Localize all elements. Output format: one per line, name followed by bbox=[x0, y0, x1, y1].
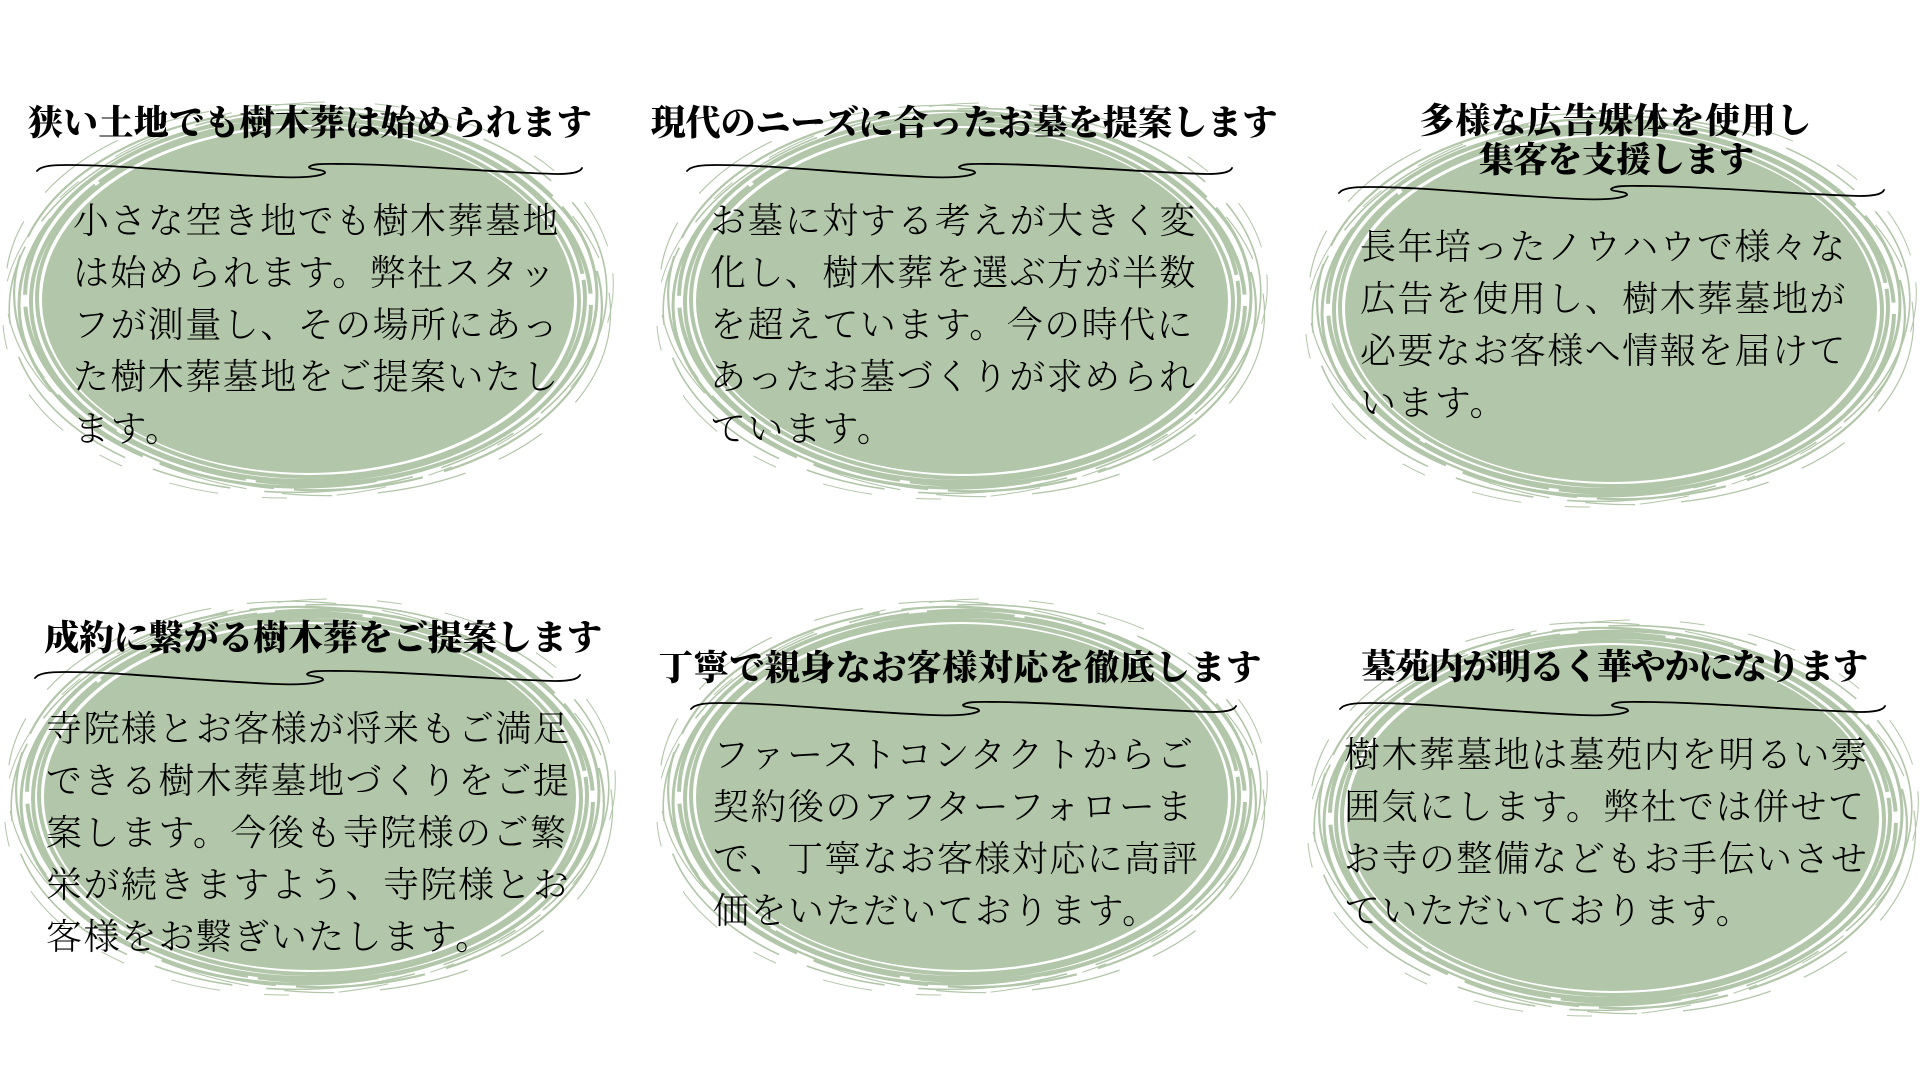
brush ellipse 5 bbox=[640, 574, 1284, 1020]
underline swash 1 bbox=[37, 164, 582, 177]
underline swash 5 bbox=[691, 702, 1236, 715]
brush ellipse 2 bbox=[640, 78, 1284, 524]
body text 1: は始められます。弊社スタッ bbox=[73, 253, 557, 293]
underline swash 6 bbox=[1340, 702, 1885, 715]
heading 5: 丁寧で親身なお客様対応を徹底します bbox=[658, 649, 1262, 688]
body text 1: フが測量し、その場所にあっ bbox=[73, 305, 560, 345]
body text 4 bbox=[46, 709, 570, 957]
body text 5: 契約後のアフターフォローま bbox=[713, 787, 1194, 827]
brush ellipse 4 bbox=[0, 574, 632, 1020]
body text 4: 客様をお繋ぎいたします。 bbox=[46, 917, 493, 957]
body text 1 bbox=[73, 201, 560, 449]
body text 1: た樹木葬墓地をご提案いたし bbox=[73, 357, 560, 397]
underline swash 3 bbox=[1339, 186, 1884, 199]
body text 3: 広告を使用し、樹木葬墓地が bbox=[1360, 279, 1847, 319]
body text 5: ファーストコンタクトからご bbox=[713, 735, 1194, 775]
body text 1: 小さな空き地でも樹木葬墓地 bbox=[73, 201, 560, 241]
heading 1: 狭い土地でも樹木葬は始められます bbox=[28, 104, 592, 143]
body text 5 bbox=[713, 735, 1199, 931]
body text 6: ていただいております。 bbox=[1344, 891, 1753, 931]
body text 3 bbox=[1360, 227, 1847, 423]
heading 2: 現代のニーズに合ったお墓を提案します bbox=[651, 104, 1277, 143]
body text 4: できる樹木葬墓地づくりをご提 bbox=[46, 761, 570, 801]
body text 2: 化し、樹木葬を選ぶ方が半数 bbox=[710, 253, 1197, 293]
heading 3 bbox=[1420, 102, 1812, 180]
body text 1: ます。 bbox=[73, 409, 182, 449]
body text 6 bbox=[1344, 735, 1868, 931]
body text 3: 長年培ったノウハウで様々な bbox=[1360, 227, 1847, 267]
heading 3: 集客を支援します bbox=[1479, 141, 1753, 180]
heading 4: 成約に繋がる樹木葬をご提案します bbox=[44, 619, 602, 658]
brush ellipse 6 bbox=[1291, 595, 1920, 1041]
heading 6: 墓苑内が明るく華やかになります bbox=[1361, 648, 1867, 687]
heading 3: 多様な広告媒体を使用し bbox=[1420, 102, 1812, 141]
body text 6: お寺の整備などもお手伝いさせ bbox=[1344, 839, 1868, 879]
body text 4: 寺院様とお客様が将来もご満足 bbox=[46, 709, 570, 749]
underline swash 4 bbox=[35, 671, 580, 684]
body text 2 bbox=[710, 201, 1197, 449]
body text 4: 案します。今後も寺院様のご繁 bbox=[46, 813, 567, 853]
body text 2: あったお墓づくりが求められ bbox=[710, 357, 1196, 397]
body text 2: ています。 bbox=[710, 409, 894, 449]
body text 3: 必要なお客様へ情報を届けて bbox=[1360, 331, 1847, 371]
body text 2: お墓に対する考えが大きく変 bbox=[710, 201, 1197, 241]
body text 5: で、丁寧なお客様対応に高評 bbox=[713, 839, 1199, 879]
body text 4: 栄が続きますよう、寺院様とお bbox=[46, 865, 570, 905]
body text 3: います。 bbox=[1360, 383, 1507, 423]
brush ellipse 3 bbox=[1289, 86, 1920, 532]
body text 6: 樹木葬墓地は墓苑内を明るい雰 bbox=[1344, 735, 1868, 775]
brush ellipse 1 bbox=[0, 77, 630, 523]
body text 6: 囲気にします。弊社では併せて bbox=[1344, 787, 1865, 827]
underline swash 2 bbox=[687, 164, 1232, 177]
body text 5: 価をいただいております。 bbox=[713, 891, 1160, 931]
body text 2: を超えています。今の時代に bbox=[710, 305, 1194, 345]
